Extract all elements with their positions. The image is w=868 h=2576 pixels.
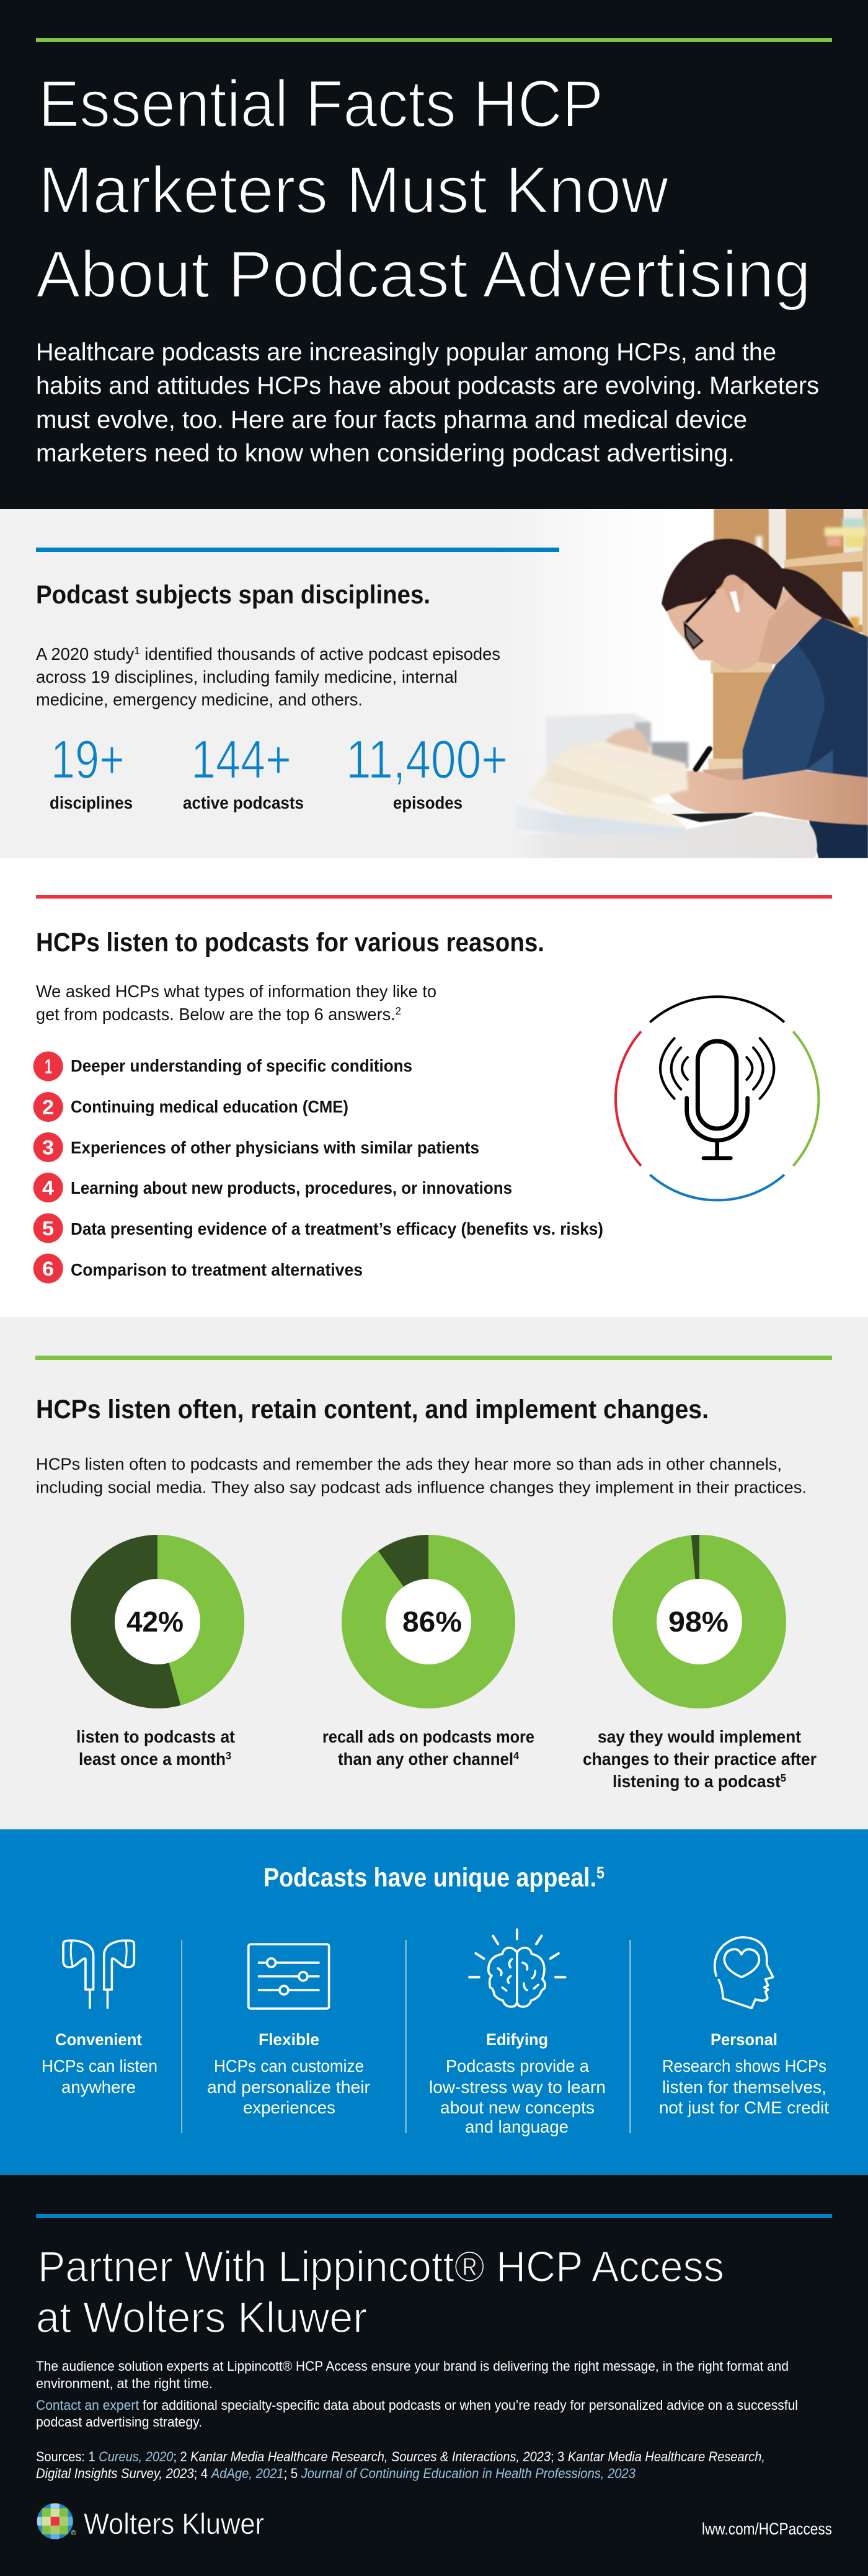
column: flexible: Flexible — [259, 2030, 319, 2049]
chart: donut 86%: 86% — [402, 1606, 462, 1638]
heading: 5 — [596, 1863, 604, 1882]
column: convenient — [42, 1940, 157, 2097]
intro text: marketers need to know when considering podcast advertising. — [36, 440, 735, 467]
heading: HCPs listen often, retain content, and implement changes. — [36, 1395, 709, 1424]
list item 2 — [33, 1092, 348, 1122]
column: convenient: anywhere — [61, 2077, 136, 2097]
column: flexible: HCPs can customize — [214, 2056, 364, 2076]
body text: HCPs listen often to podcasts and remember the ads they hear more so than ads in other channels, — [36, 1455, 782, 1473]
list item 4: 4 — [42, 1177, 54, 1199]
column: personal: Research shows HCPs — [662, 2056, 826, 2076]
list item 1: Deeper understanding of specific conditions — [71, 1056, 412, 1075]
stat: disciplines: 19+ — [51, 729, 125, 790]
chart: donut 42%: 42% — [126, 1606, 184, 1638]
column: edifying: and language — [465, 2117, 569, 2136]
list item 5 — [33, 1213, 603, 1243]
caption: donut 42%: listen to podcasts at — [76, 1727, 235, 1746]
column: edifying: Podcasts provide a — [446, 2056, 589, 2076]
sources: Digital Insights Survey, 2023; 4 AdAge, 2021; 5 Journal of Continuing Education in Health Professions, 2023 — [36, 2466, 636, 2481]
sub: forearm — [669, 770, 868, 825]
icon: globe — [37, 2503, 74, 2540]
icon: brain with rays — [469, 1930, 565, 2007]
panel: unique appeal — [0, 1829, 868, 2175]
body text — [36, 1455, 807, 1497]
body text — [36, 982, 436, 1024]
sub: neck and face — [666, 582, 822, 671]
list item 3: 3 — [42, 1136, 54, 1158]
sub: scrubs — [743, 617, 868, 779]
body text: identified thousands of active podcast episodes — [140, 644, 500, 664]
intro text: habits and attitudes HCPs have about podcasts are evolving. Marketers — [36, 372, 819, 399]
sub: couch and far hand — [546, 713, 688, 775]
heading: HCPs listen to podcasts for various reasons. — [36, 928, 544, 957]
list item 1 — [33, 1052, 412, 1081]
column: convenient: HCPs can listen — [42, 2056, 157, 2076]
panel: header — [0, 0, 868, 509]
sub: phone — [670, 812, 755, 822]
title: About Podcast Advertising — [36, 237, 811, 311]
list item 6 — [33, 1254, 363, 1284]
panel: podcast subjects — [0, 509, 868, 858]
chart: donut 42% — [71, 1535, 244, 1708]
list item 2: 2 — [42, 1096, 54, 1119]
caption: donut 42%: least once a month — [79, 1749, 236, 1769]
body text: including social media. They also say podcast ads influence changes they implement in their practices. — [36, 1478, 807, 1497]
body text: We asked HCPs what types of information they like to — [36, 982, 436, 1001]
body text: get from podcasts. Below are the top 6 answers. — [36, 1005, 407, 1024]
body text — [36, 644, 500, 709]
body text: across 19 disciplines, including family medicine, internal — [36, 667, 458, 686]
stat: disciplines — [50, 729, 133, 812]
body text: Contact an expert for additional specialty-specific data about podcasts or when you’re ready for personalized advice on a successful — [36, 2397, 798, 2413]
icon: microphone in ring — [616, 997, 818, 1200]
heading: Podcasts have unique appeal. — [264, 1863, 644, 1893]
title: Marketers Must Know — [38, 153, 669, 227]
panel: partner footer — [36, 2214, 832, 2539]
caption: donut 98%: listening to a podcast — [613, 1772, 791, 1791]
sources: Sources: 1 Cureus, 2020; 2 Kantar Media Healthcare Research, Sources & Interactions, 2023; 3 Kantar Media Healthcare Research, — [36, 2449, 765, 2464]
column: personal: listen for themselves, — [662, 2077, 826, 2097]
caption: donut 98%: say they would implement — [598, 1727, 801, 1746]
caption: donut 86%: than any other channel — [338, 1749, 528, 1769]
list item 3: Experiences of other physicians with similar patients — [71, 1138, 479, 1157]
title — [36, 66, 811, 311]
column: personal — [659, 1937, 829, 2117]
caption: donut 42% — [76, 1727, 235, 1769]
stat: episodes: episodes — [393, 793, 463, 812]
column: edifying: low-stress way to learn — [429, 2077, 606, 2097]
panel: listen often — [0, 1317, 868, 1829]
body text: podcast advertising strategy. — [36, 2414, 202, 2430]
column: flexible: and personalize their — [207, 2077, 370, 2097]
chart: donut 98%: 98% — [668, 1606, 728, 1638]
sub: pen — [696, 748, 709, 770]
column: convenient: Convenient — [55, 2030, 142, 2049]
body text: environment, at the right time. — [36, 2376, 213, 2391]
list item 6: 6 — [42, 1258, 54, 1280]
stat: active podcasts — [183, 729, 304, 812]
stat: episodes — [346, 729, 508, 812]
list item 5: Data presenting evidence of a treatment’s efficacy (benefits vs. risks) — [71, 1219, 603, 1238]
title: Essential Facts HCP — [38, 66, 603, 141]
caption: donut 86%: recall ads on podcasts more — [322, 1727, 534, 1746]
column: edifying — [429, 1930, 606, 2136]
stat: active podcasts: active podcasts — [183, 793, 304, 812]
body text: A 2020 study — [36, 644, 136, 664]
column: flexible: experiences — [243, 2098, 335, 2117]
stat: active podcasts: 144+ — [191, 729, 291, 790]
caption: donut 98%: 5 — [781, 1772, 786, 1784]
list item 2: Continuing medical education (CME) — [71, 1097, 348, 1116]
sub: hair — [662, 539, 854, 628]
column: edifying: Edifying — [486, 2030, 548, 2049]
caption: donut 86%: 4 — [513, 1749, 519, 1762]
icon: sliders — [249, 1944, 329, 2009]
logo: Wolters Kluwer: Wolters Kluwer — [84, 2507, 264, 2540]
column: flexible — [207, 1944, 370, 2117]
chart: donut 86% — [342, 1535, 515, 1708]
title: Partner With Lippincott® HCP Access — [38, 2242, 724, 2291]
body text — [36, 2358, 798, 2430]
caption: donut 98% — [583, 1727, 817, 1791]
caption: donut 98%: changes to their practice after — [583, 1749, 817, 1769]
sub: ear — [722, 575, 744, 607]
stat: disciplines: disciplines — [50, 793, 133, 812]
sources — [36, 2449, 765, 2481]
logo: Wolters Kluwer: ® — [71, 2529, 76, 2537]
list item 6: Comparison to treatment alternatives — [71, 1260, 363, 1279]
intro text: Healthcare podcasts are increasingly popular among HCPs, and the — [36, 339, 776, 366]
body text: 1 — [134, 644, 140, 657]
icon: earbuds — [63, 1940, 134, 2009]
list item 3 — [33, 1132, 479, 1162]
list item 4: Learning about new products, procedures, or innovations — [71, 1178, 512, 1197]
logo: Wolters Kluwer — [37, 2503, 264, 2540]
stat: episodes: 11,400+ — [346, 729, 508, 790]
sub: person — [510, 539, 868, 858]
intro text — [36, 339, 819, 467]
icon: head with heart — [715, 1937, 773, 2008]
title — [36, 2242, 724, 2342]
list item 1: 1 — [45, 1055, 52, 1078]
photo: woman with earbuds writing — [496, 509, 868, 858]
list item 5: 5 — [42, 1217, 54, 1240]
heading: Podcast subjects span disciplines. — [36, 580, 430, 609]
body text: medicine, emergency medicine, and others. — [36, 690, 363, 709]
url: lww.com/HCPaccess — [702, 2520, 832, 2538]
chart: donut 98% — [613, 1535, 786, 1708]
intro text: must evolve, too. Here are four facts pharma and medical device — [36, 406, 747, 433]
column: personal: not just for CME credit — [659, 2098, 829, 2117]
list item 4 — [33, 1173, 512, 1202]
caption: donut 42%: 3 — [226, 1749, 231, 1762]
sub: papers — [515, 741, 688, 834]
sub: glasses — [686, 591, 715, 623]
caption: donut 86% — [322, 1727, 534, 1769]
sub: earbud — [730, 591, 740, 612]
body text: The audience solution experts at Lippincott® HCP Access ensure your brand is delivering the right message, in the right format and — [36, 2358, 789, 2374]
column: edifying: about new concepts — [440, 2098, 595, 2117]
panel: reasons — [0, 858, 868, 1317]
body text: 2 — [396, 1005, 401, 1017]
sub: table — [510, 815, 817, 858]
column: personal: Personal — [711, 2030, 777, 2049]
title: at Wolters Kluwer — [36, 2293, 367, 2342]
